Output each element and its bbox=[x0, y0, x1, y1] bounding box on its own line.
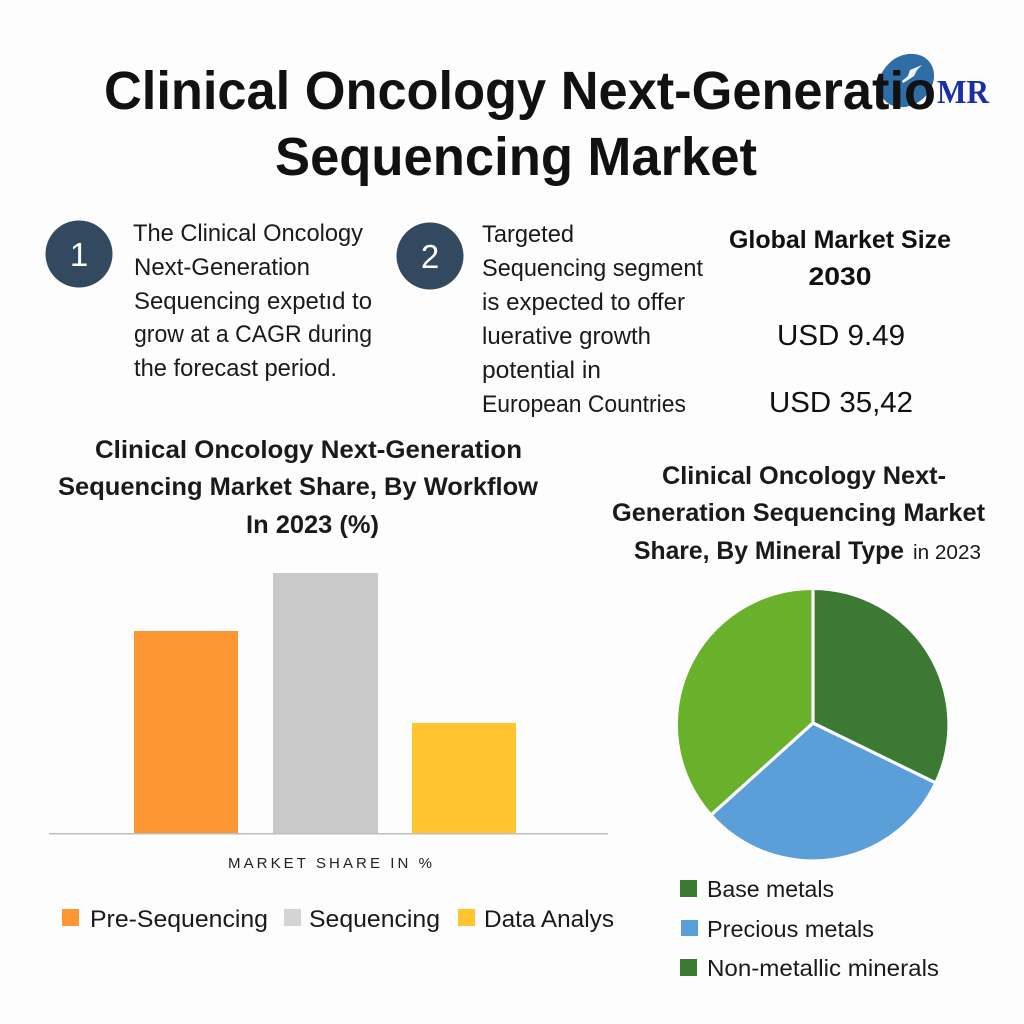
bar chart heading: In 2023 (%) bbox=[246, 511, 379, 539]
text block 1: Next-Generation bbox=[134, 254, 310, 281]
legend: base metals: Base metals bbox=[707, 876, 834, 902]
badge 2: 2 bbox=[421, 238, 439, 275]
text block 1: grow at a CAGR during bbox=[134, 321, 372, 348]
global market size: USD 9.49 bbox=[777, 320, 905, 352]
text block 1 bbox=[133, 220, 372, 382]
text block 2: potential in bbox=[482, 357, 601, 384]
badge 1: 1 bbox=[70, 236, 88, 273]
point 1 bbox=[46, 220, 372, 382]
pie chart bbox=[678, 588, 947, 859]
title: Clinical Oncology Next-Generatio bbox=[104, 61, 936, 121]
global market size: 2030 bbox=[808, 263, 872, 291]
legend: sequencing: Sequencing bbox=[309, 906, 440, 933]
text block 2: is expected to offer bbox=[482, 289, 685, 316]
legend: non-metallic minerals: Non-metallic minerals bbox=[707, 955, 939, 981]
bar: pre-sequencing bbox=[134, 631, 238, 834]
pie chart heading: Generation Sequencing Market bbox=[612, 499, 986, 527]
legend: pre-sequencing: Pre-Sequencing bbox=[90, 906, 268, 933]
title: Sequencing Market bbox=[275, 127, 757, 187]
text block 2: Targeted bbox=[482, 221, 574, 248]
bar chart heading bbox=[58, 436, 539, 539]
global market size: USD 35,42 bbox=[769, 387, 913, 419]
bar: sequencing bbox=[273, 573, 378, 834]
bar chart legend bbox=[62, 906, 614, 933]
text block 2: luerative growth bbox=[482, 323, 651, 350]
global market size bbox=[729, 226, 951, 419]
axis line bbox=[49, 833, 608, 834]
logo: MR: MR bbox=[937, 74, 990, 111]
global market size: Global Market Size bbox=[729, 226, 951, 254]
text block 2: Sequencing segment bbox=[482, 255, 703, 282]
bar chart bbox=[49, 573, 608, 872]
text block 2: European Countries bbox=[482, 391, 686, 418]
legend: data analysis: Data Analys bbox=[484, 906, 614, 933]
bar chart heading: Clinical Oncology Next-Generation bbox=[95, 436, 522, 464]
text block 1: the forecast period. bbox=[134, 355, 337, 382]
axis label: MARKET SHARE IN % bbox=[228, 855, 432, 872]
text block 1: The Clinical Oncology bbox=[133, 220, 363, 247]
slice: non-metallic minerals bbox=[678, 590, 813, 814]
pie chart heading: in 2023 bbox=[913, 542, 981, 564]
slice: precious metals bbox=[712, 724, 934, 859]
legend: precious metals: Precious metals bbox=[707, 916, 874, 942]
badge 1 bbox=[46, 220, 112, 288]
title bbox=[104, 61, 936, 187]
pie chart legend bbox=[680, 876, 939, 981]
logo: MR bbox=[868, 43, 990, 118]
pie chart heading: Share, By Mineral Type bbox=[634, 537, 904, 565]
bar chart heading: Sequencing Market Share, By Workflow bbox=[58, 473, 539, 501]
text block 1: Sequencing expetıd to bbox=[134, 288, 372, 315]
badge 2 bbox=[396, 222, 464, 290]
pie chart heading bbox=[612, 462, 986, 565]
slice: base metals bbox=[813, 590, 947, 783]
point 2 bbox=[396, 221, 703, 418]
pie chart heading: Clinical Oncology Next- bbox=[662, 462, 946, 490]
bar: data analysis bbox=[412, 723, 516, 834]
text block 2 bbox=[482, 221, 703, 418]
